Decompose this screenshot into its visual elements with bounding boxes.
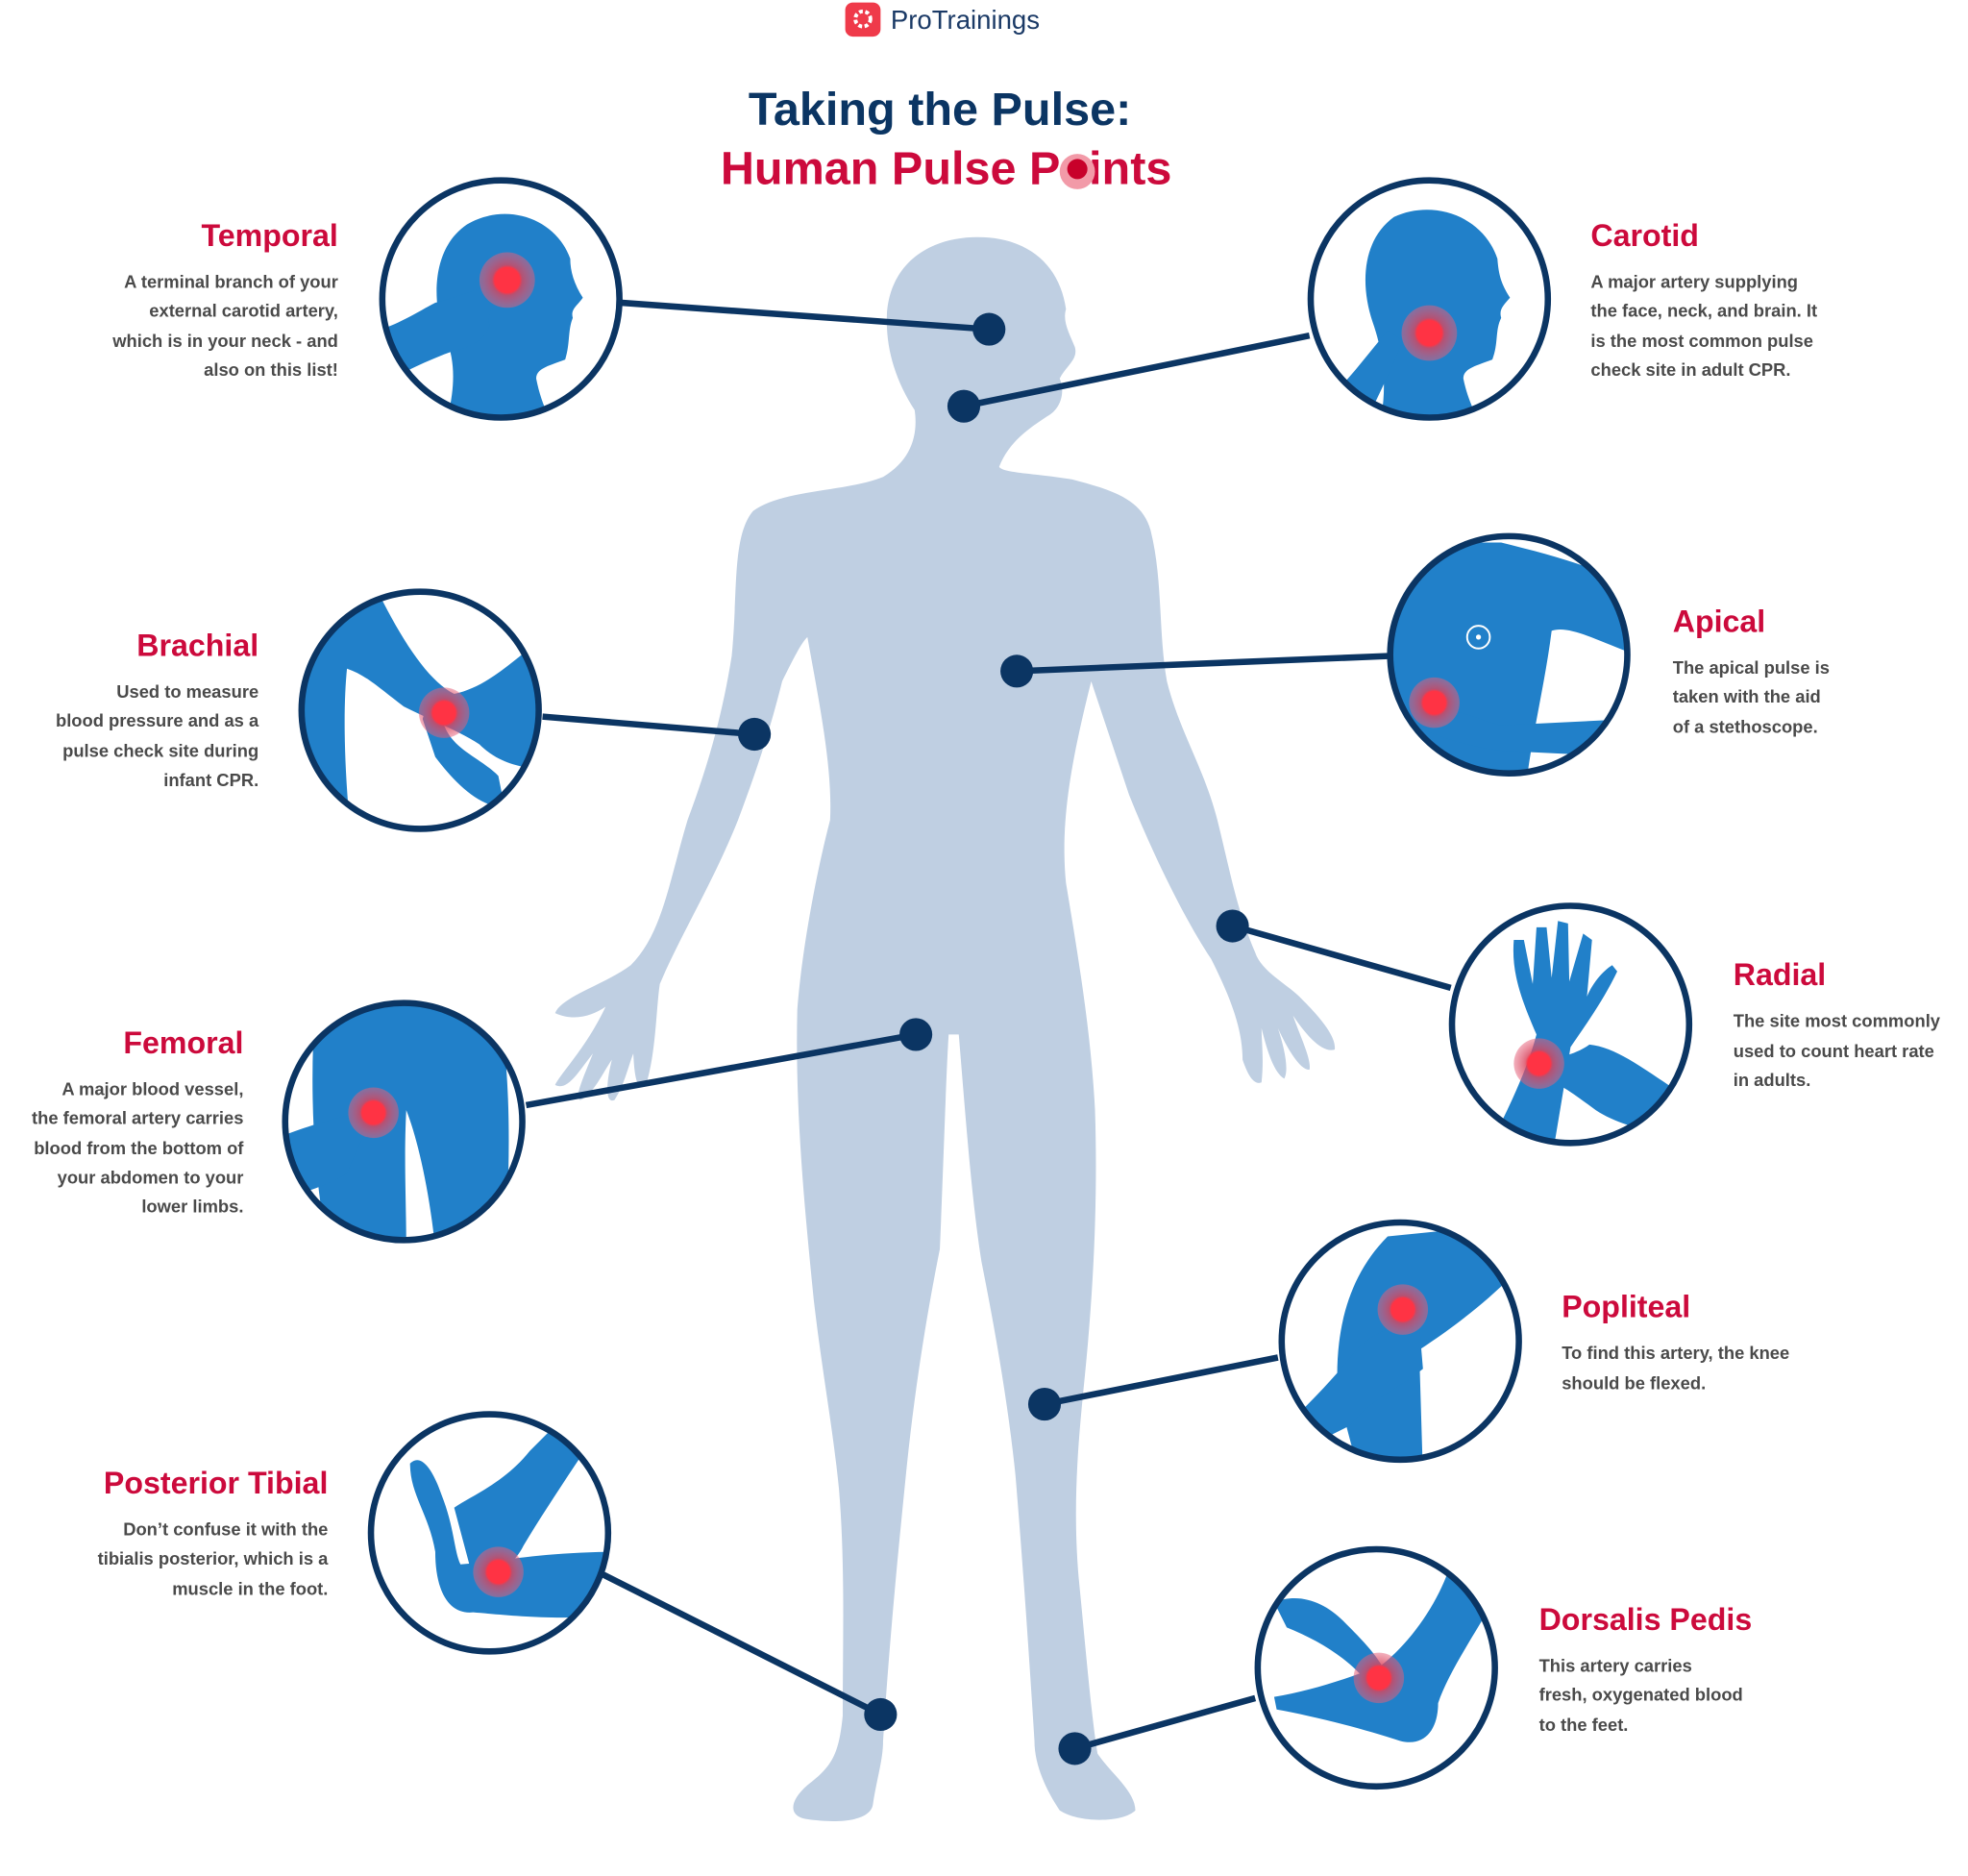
text: temporal: also on this list! bbox=[204, 359, 338, 380]
body silhouette bbox=[555, 237, 1335, 1821]
text: popliteal: To find this artery, the knee bbox=[1562, 1343, 1789, 1363]
text: radial: used to count heart rate bbox=[1734, 1041, 1934, 1061]
text: popliteal bbox=[1562, 1289, 1789, 1393]
text: posterior tibial bbox=[98, 1466, 329, 1598]
text: temporal: external carotid artery, bbox=[149, 300, 338, 320]
text: temporal bbox=[111, 218, 338, 380]
text: posterior tibial: Posterior Tibial bbox=[104, 1466, 328, 1500]
text: posterior tibial: muscle in the foot. bbox=[172, 1578, 328, 1598]
icon: brachial bbox=[298, 588, 542, 832]
icon: carotid bbox=[1311, 181, 1548, 429]
title: Taking the Pulse: bbox=[749, 84, 1131, 136]
text: apical: Apical bbox=[1673, 605, 1765, 639]
text: temporal: which is in your neck - and bbox=[111, 331, 338, 351]
text: carotid: is the most common pulse bbox=[1590, 331, 1813, 351]
icon: popliteal bbox=[1282, 1222, 1519, 1476]
text: brachial: pulse check site during bbox=[62, 741, 258, 761]
text: brachial bbox=[56, 629, 259, 790]
text: femoral: your abdomen to your bbox=[58, 1167, 243, 1187]
text: radial: The site most commonly bbox=[1734, 1011, 1941, 1031]
text: temporal: A terminal branch of your bbox=[124, 271, 338, 291]
text: carotid: A major artery supplying bbox=[1590, 271, 1798, 291]
logo: ProTrainings bbox=[891, 5, 1040, 35]
text: brachial: Brachial bbox=[136, 629, 258, 663]
text: apical bbox=[1673, 605, 1830, 737]
text: dorsalis pedis bbox=[1539, 1602, 1752, 1735]
text: posterior tibial: Don’t confuse it with the bbox=[123, 1519, 328, 1540]
icon: femoral bbox=[283, 1003, 523, 1249]
text: temporal: Temporal bbox=[202, 218, 338, 253]
icon: temporal bbox=[379, 181, 620, 429]
icon: apical bbox=[1388, 536, 1640, 782]
text: popliteal: Popliteal bbox=[1562, 1289, 1690, 1323]
icon: dorsalis pedis bbox=[1258, 1549, 1513, 1787]
title: Human Pulse Points bbox=[721, 143, 1171, 195]
pulse dots bbox=[738, 313, 1249, 1765]
text: popliteal: should be flexed. bbox=[1562, 1372, 1706, 1393]
logo bbox=[846, 3, 1040, 37]
text: dorsalis pedis: fresh, oxygenated blood bbox=[1539, 1685, 1743, 1705]
text: femoral: A major blood vessel, bbox=[62, 1078, 243, 1098]
text: carotid: check site in adult CPR. bbox=[1590, 359, 1791, 380]
text: apical: The apical pulse is bbox=[1673, 657, 1830, 678]
text: dorsalis pedis: Dorsalis Pedis bbox=[1539, 1602, 1752, 1637]
text: apical: taken with the aid bbox=[1673, 686, 1821, 706]
text: radial: Radial bbox=[1734, 957, 1826, 992]
text: femoral: Femoral bbox=[123, 1025, 243, 1060]
text: brachial: infant CPR. bbox=[163, 770, 258, 790]
text: dorsalis pedis: This artery carries bbox=[1539, 1655, 1692, 1675]
text: carotid: the face, neck, and brain. It bbox=[1590, 300, 1817, 320]
text: radial: in adults. bbox=[1734, 1070, 1810, 1090]
text: apical: of a stethoscope. bbox=[1673, 717, 1818, 737]
text: femoral bbox=[32, 1025, 244, 1217]
connector lines bbox=[526, 303, 1451, 1748]
title bbox=[721, 84, 1171, 195]
text: carotid bbox=[1590, 218, 1817, 380]
icon: radial bbox=[1452, 906, 1689, 1161]
text: dorsalis pedis: to the feet. bbox=[1539, 1715, 1628, 1735]
text: femoral: lower limbs. bbox=[141, 1197, 243, 1217]
icon: posterior tibial bbox=[371, 1413, 618, 1651]
text: femoral: the femoral artery carries bbox=[32, 1108, 243, 1128]
text: femoral: blood from the bottom of bbox=[34, 1138, 244, 1158]
text: posterior tibial: tibialis posterior, which is a bbox=[98, 1548, 329, 1568]
text: brachial: Used to measure bbox=[116, 681, 258, 702]
text: carotid: Carotid bbox=[1590, 218, 1699, 253]
text: brachial: blood pressure and as a bbox=[56, 710, 259, 730]
text: radial bbox=[1734, 957, 1941, 1090]
